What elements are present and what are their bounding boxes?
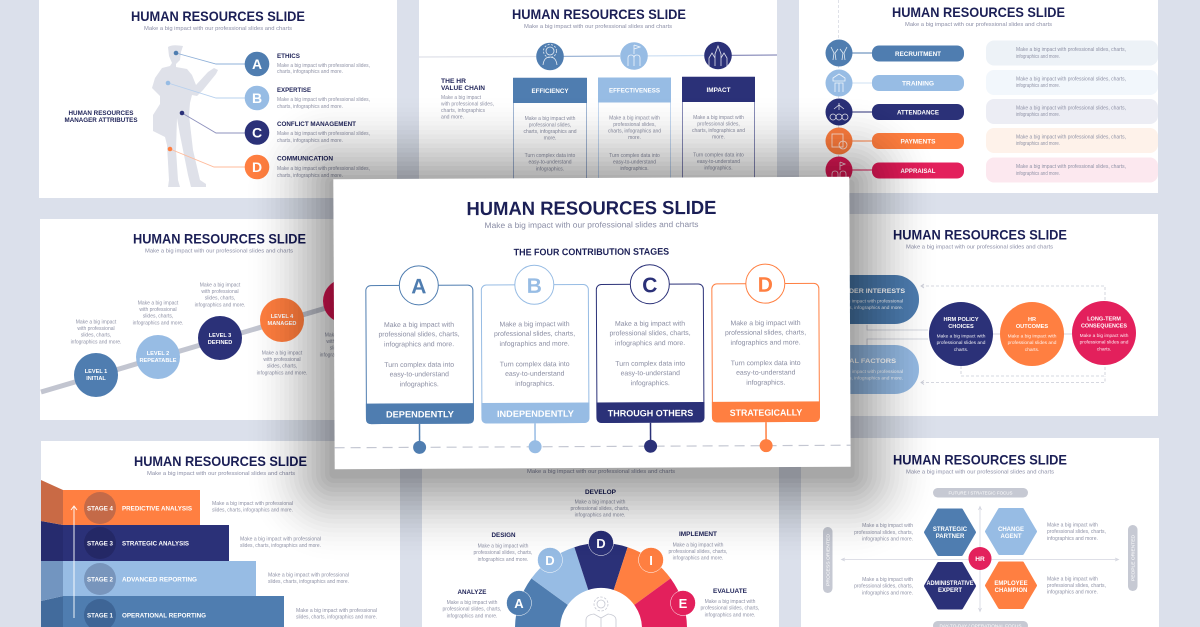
card D: strategically: STRATEGICALLY (730, 407, 802, 418)
stage 3 strategic analysis: slides, charts, infographics and more. (240, 543, 321, 549)
level 2 repeatable: with professional (139, 307, 177, 313)
row: appraisal (826, 156, 1158, 184)
text: strategic partner note: professional slides, charts, (854, 530, 913, 536)
circle: HRM policy choices (929, 302, 993, 366)
row: payments (826, 128, 1158, 154)
circle: HRM policy choices: Make a big impact with (937, 334, 986, 340)
text: change agent note: Make a big impact with (1047, 522, 1098, 528)
row: training (826, 70, 1158, 96)
stage 3 strategic analysis (41, 521, 321, 561)
step: develop: infographics and more. (575, 512, 625, 518)
text: the HR value chain: Make a big impact (441, 95, 482, 101)
hexagon: strategic partner: STRATEGIC (933, 527, 968, 533)
step: evaluate: Make a big impact with (705, 599, 756, 605)
circle: HR outcomes: HR (1028, 317, 1036, 323)
row: recruitment: RECRUITMENT (895, 52, 941, 58)
card: effectiveness: more. (628, 135, 641, 141)
card B: independently: B (527, 275, 542, 298)
diagonal growth line (41, 298, 360, 392)
card D: strategically: easy-to-understand (736, 370, 796, 377)
subtitle: main slide: Make a big impact with our professional slides and charts (485, 220, 699, 230)
level 1 initial: infographics and more. (71, 340, 121, 346)
stage 2 advanced reporting: Make a big impact with professional (268, 572, 349, 578)
level 3 defined (195, 282, 245, 360)
circle: HR centre: HR (975, 556, 985, 563)
text: the HR value chain: with professional slides, (441, 102, 494, 108)
panel: HR process list slide (799, 0, 1158, 193)
card: effectiveness: easy-to-understand (613, 160, 656, 166)
stage 4 predictive analysis: Make a big impact with professional (212, 501, 293, 507)
stage 3 strategic analysis: STAGE 3 (87, 540, 114, 548)
pill: situational factors: SITUATIONAL FACTORS (810, 359, 896, 365)
step: design: professional slides, charts, (474, 550, 532, 556)
text: the HR value chain: THE HR (441, 79, 467, 85)
card: impact: more. (712, 134, 725, 140)
icon: impact growth people (704, 42, 732, 69)
card B: independently: INDEPENDENTLY (497, 409, 574, 419)
card D: strategically (711, 264, 820, 452)
title: stages slide: HUMAN RESOURCES SLIDE (134, 453, 307, 469)
level 4 managed: slides, charts, (267, 364, 297, 370)
card D: strategically: Turn complex data into (731, 360, 801, 367)
card C: through others: C (642, 274, 657, 297)
attribute A: Make a big impact with professional slides, (277, 63, 370, 69)
level 3 defined: LEVEL 3 (209, 333, 231, 339)
row: recruitment: Make a big impact with professional slides, charts, (1016, 47, 1126, 53)
panel: HR roles quadrant slide (801, 438, 1159, 627)
circle: HR outcomes: charts. (1025, 347, 1039, 353)
circle: long-term consequences: professional slides and (1080, 340, 1129, 346)
attribute C: CONFLICT MANAGEMENT (277, 122, 356, 128)
card B: independently (481, 265, 590, 454)
hexagon: employee champion: CHAMPION (995, 588, 1027, 594)
axis pill: process oriented: PROCESS ORIENTED (826, 533, 831, 586)
attribute B (166, 81, 370, 110)
level 5 optimizing: with professional (326, 339, 364, 345)
title: main slide: HUMAN RESOURCES SLIDE (466, 198, 716, 220)
text: employee champion note: professional slides, charts, (1047, 583, 1106, 589)
circle: long-term consequences: Make a big impact with (1080, 333, 1129, 339)
step: design (474, 533, 562, 572)
row: training: TRAINING (902, 82, 934, 88)
card: efficiency: Make a big impact with (525, 116, 576, 122)
card C: through others: easy-to-understand (621, 370, 680, 377)
hexagon: change agent: AGENT (1000, 534, 1022, 540)
card B: independently: infographics. (515, 381, 554, 388)
hexagon: change agent: CHANGE (998, 527, 1024, 533)
hexagon: employee champion (986, 563, 1036, 608)
step: develop: professional slides, charts, (571, 506, 629, 512)
text: employee champion note: infographics and more. (1047, 590, 1098, 596)
attribute A: A (252, 56, 262, 72)
level 2 repeatable: LEVEL 2 (147, 351, 169, 357)
level 3 defined: slides, charts, (205, 296, 235, 302)
card: impact: easy-to-understand (697, 159, 740, 165)
level 4 managed: with professional (263, 357, 301, 363)
text: strategic partner note: Make a big impact with (862, 523, 913, 529)
step: evaluate (670, 589, 759, 618)
text: the HR value chain: charts, infographics (441, 108, 486, 114)
level 4 managed: infographics and more. (257, 370, 307, 376)
step: evaluate: E (679, 596, 688, 611)
card D: strategically: professional slides, charts, (725, 329, 806, 337)
stage 1 operational reporting (41, 596, 377, 627)
level 3 defined: with professional (201, 289, 239, 295)
text: employee champion note (1047, 576, 1106, 596)
row: appraisal: APPRAISAL (900, 169, 936, 175)
card: effectiveness: Make a big impact with (609, 116, 660, 122)
card A: dependently: Make a big impact with (384, 322, 454, 329)
level 1 initial: slides, charts, (81, 332, 111, 338)
text: strategic partner note: infographics and more. (862, 536, 913, 542)
subtitle: stages slide: Make a big impact with our professional slides and charts (147, 471, 295, 477)
card: impact (682, 77, 755, 192)
step: evaluate: professional slides, charts, (701, 606, 759, 612)
level 1 initial: Make a big impact (76, 320, 117, 326)
row: payments: Make a big impact with professional slides, charts, (1016, 134, 1126, 140)
level 2 repeatable: REPEATABLE (139, 358, 177, 364)
step: evaluate: EVALUATE (713, 589, 747, 595)
pill: situational factors (800, 345, 919, 394)
attribute C: charts, infographics and more. (277, 138, 343, 144)
arrow: upward progression (71, 506, 77, 618)
attribute A: charts, infographics and more. (277, 69, 343, 75)
circle: HRM policy choices: professional slides and (937, 340, 986, 346)
main slide drop shadow (244, 94, 940, 564)
attribute C: C (252, 124, 262, 140)
text: administrative expert note: professional slides, charts, (854, 584, 913, 590)
chain line (419, 55, 777, 57)
panel: manager attributes slide (39, 0, 397, 198)
card: effectiveness: infographics. (620, 166, 649, 172)
title: value chain slide: HUMAN RESOURCES SLIDE (512, 6, 686, 22)
stage 1 operational reporting: Make a big impact with professional (296, 608, 377, 614)
card: impact: Make a big impact with (693, 115, 744, 121)
attribute B: EXPERTISE (277, 88, 311, 94)
row: attendance: ATTENDANCE (897, 110, 939, 116)
level 2 repeatable: slides, charts, (143, 314, 173, 320)
pill: stakeholder interests (800, 275, 919, 324)
text: employee champion note: Make a big impact with (1047, 576, 1098, 582)
heading: the four contribution stages: THE FOUR CONTRIBUTION STAGES (514, 247, 669, 258)
text: strategic partner note (854, 523, 913, 542)
subtitle: ADDIE slide: Make a big impact with our professional slides and charts (527, 469, 675, 475)
card: efficiency (513, 78, 587, 193)
title: process list slide: HUMAN RESOURCES SLIDE (892, 4, 1065, 20)
step: analyze: Make a big impact with (447, 600, 498, 606)
attribute D: charts, infographics and more. (277, 173, 343, 179)
subtitle: flow slide: Make a big impact with our professional slides and charts (906, 244, 1053, 250)
card: impact: infographics. (704, 166, 733, 172)
circle: HRM policy choices: charts. (954, 347, 968, 353)
attribute D: Make a big impact with professional slides, (277, 166, 370, 172)
title: attributes slide: HUMAN RESOURCES SLIDE (131, 8, 305, 24)
stage 4 predictive analysis: slides, charts, infographics and more. (212, 508, 293, 514)
row: training: Make a big impact with professional slides, charts, (1016, 76, 1126, 82)
panel: four contribution stages slide (333, 177, 851, 469)
card B: independently: Make a big impact with (499, 321, 570, 328)
title: flow slide: HUMAN RESOURCES SLIDE (893, 226, 1067, 242)
step: analyze: infographics and more. (447, 614, 497, 620)
title: quadrant slide: HUMAN RESOURCES SLIDE (893, 452, 1067, 468)
circle: HRM policy choices: HRM POLICY (943, 317, 979, 323)
step: design: infographics and more. (478, 557, 528, 563)
card: impact: Turn complex data into (693, 152, 744, 158)
row: attendance (826, 98, 1158, 126)
level 1 initial: LEVEL 1 (85, 369, 107, 375)
text: the HR value chain: and more. (441, 114, 464, 120)
subtitle: maturity slide: Make a big impact with our professional slides and charts (145, 248, 293, 254)
card: effectiveness: professional slides, (613, 122, 656, 128)
card: efficiency: professional slides, (529, 122, 571, 128)
row: attendance: Make a big impact with professional slides, charts, (1016, 106, 1126, 112)
pill: stakeholder interests: STAKEHOLDER INTERESTS (811, 289, 905, 295)
card A: dependently: professional slides, charts, (378, 331, 460, 339)
circle: HR centre (968, 547, 992, 570)
step: implement: IMPLEMENT (679, 532, 717, 538)
quadrant axes (842, 506, 1118, 612)
card: impact: IMPACT (706, 87, 731, 94)
card A: dependently: infographics and more. (384, 341, 454, 349)
level 2 repeatable: infographics and more. (133, 320, 183, 326)
axis pill: strategic focus: FUTURE / STRATEGIC FOCUS (948, 491, 1012, 496)
level 3 defined: infographics and more. (195, 302, 245, 308)
card B: independently: easy-to-understand (505, 371, 565, 378)
hexagon: strategic partner: PARTNER (936, 534, 965, 540)
hexagon: administrative expert: EXPERT (938, 588, 962, 594)
attribute A (174, 51, 370, 76)
level 4 managed: Make a big impact (262, 350, 303, 356)
step: implement: I (649, 553, 653, 568)
step: implement (638, 532, 727, 572)
circle: HRM policy choices: CHOICES (948, 324, 974, 330)
level 5 optimizing (320, 279, 370, 358)
card B: independently: professional slides, charts, (494, 331, 575, 338)
row: recruitment: infographics and more. (1016, 54, 1060, 60)
panel: analytics stages slide (41, 441, 400, 627)
panel: ADDIE wheel slide (422, 440, 779, 627)
card C: through others: infographics. (631, 380, 670, 387)
row: attendance: infographics and more. (1016, 112, 1060, 118)
subtitle: quadrant slide: Make a big impact with our professional slides and charts (906, 470, 1054, 476)
circle: long-term consequences: charts. (1097, 346, 1111, 352)
card C: through others: infographics and more. (615, 340, 685, 347)
feedback arrows (867, 284, 1105, 384)
stage 4 predictive analysis: STAGE 4 (87, 506, 114, 512)
title: maturity slide: HUMAN RESOURCES SLIDE (133, 230, 306, 246)
card: efficiency: EFFICIENCY (532, 88, 569, 95)
card D: strategically: infographics and more. (731, 339, 801, 347)
axis pill: strategic focus (933, 488, 1028, 498)
card: efficiency: easy-to-understand (528, 160, 572, 166)
axis pill: process oriented (823, 527, 832, 593)
pill: situational factors: slides, charts, infographics and more. (824, 376, 903, 382)
step: design: D (545, 553, 555, 568)
axis pill: people oriented: PEOPLE ORIENTED (1131, 534, 1136, 581)
card: impact: charts, infographics and (692, 128, 745, 134)
attribute A: ETHICS (277, 54, 300, 60)
card: effectiveness (598, 78, 671, 193)
text: change agent note: infographics and more. (1047, 536, 1098, 542)
step: analyze (443, 590, 532, 620)
level 3 defined: DEFINED (208, 340, 232, 346)
axis pill: people oriented (1128, 525, 1138, 591)
stage 2 advanced reporting: slides, charts, infographics and more. (268, 579, 349, 585)
hexagon: strategic partner (926, 510, 974, 554)
card: efficiency: more. (544, 136, 556, 142)
baseline dashed timeline (335, 445, 851, 448)
level 5 optimizing: infographics and more. (320, 352, 370, 358)
step: develop: Make a big impact with (575, 500, 626, 506)
card A: dependently (365, 266, 474, 454)
level 4 managed: MANAGED (268, 321, 296, 327)
row: payments: PAYMENTS (900, 140, 936, 146)
attribute B: B (252, 90, 262, 106)
card: effectiveness: EFFECTIVENESS (609, 88, 660, 94)
row: payments: infographics and more. (1016, 141, 1060, 147)
card B: independently: Turn complex data into (500, 361, 570, 368)
row: recruitment (826, 40, 1158, 66)
circle: long-term consequences: LONG-TERM (1087, 316, 1121, 322)
step: implement: infographics and more. (673, 556, 723, 562)
step: implement: professional slides, charts, (669, 549, 727, 555)
step: analyze: professional slides, charts, (443, 606, 501, 612)
label: manager attributes: MANAGER ATTRIBUTES (64, 118, 138, 124)
attribute B: charts, infographics and more. (277, 104, 343, 110)
stage 2 advanced reporting (41, 561, 349, 601)
card C: through others: THROUGH OTHERS (608, 408, 693, 418)
circle: HR outcomes: Make a big impact with (1008, 334, 1057, 340)
circle: HR outcomes: professional slides and (1008, 340, 1057, 346)
level 1 initial (71, 320, 121, 397)
row: training: infographics and more. (1016, 83, 1060, 89)
hexagon: change agent (986, 510, 1036, 554)
stage 4 predictive analysis (41, 480, 293, 525)
card C: through others (596, 264, 705, 453)
card A: dependently: Turn complex data into (384, 362, 454, 369)
row: appraisal: infographics and more. (1016, 171, 1060, 177)
hexagon: administrative expert: ADMINISTRATIVE (926, 581, 974, 587)
label: manager attributes (64, 111, 138, 124)
card: effectiveness: charts, infographics and (608, 128, 661, 134)
text: administrative expert note: Make a big impact with (862, 577, 913, 583)
level 2 repeatable (133, 300, 183, 379)
panel: maturity levels slide (40, 219, 398, 420)
icon: person with gear (586, 597, 616, 627)
stage 1 operational reporting: slides, charts, infographics and more. (296, 614, 377, 620)
card A: dependently: infographics. (400, 381, 439, 388)
card: impact: professional slides, (697, 122, 740, 128)
hexagon: administrative expert (926, 564, 974, 608)
step: develop (571, 490, 629, 556)
card D: strategically: Make a big impact with (730, 320, 801, 327)
text: administrative expert note: infographics and more. (862, 590, 913, 596)
stage 2 advanced reporting: ADVANCED REPORTING (122, 576, 197, 584)
attribute D (168, 147, 370, 179)
step: develop: DEVELOP (585, 490, 616, 496)
stage 3 strategic analysis: STRATEGIC ANALYSIS (122, 540, 189, 548)
level 1 initial: INITIAL (86, 376, 106, 382)
card D: strategically: D (758, 274, 773, 297)
text: administrative expert note (854, 577, 913, 596)
text: change agent note: professional slides, charts, (1047, 529, 1106, 535)
semicircle wheel segments (515, 543, 687, 627)
level 4 managed (257, 298, 307, 376)
stage 3 strategic analysis: Make a big impact with professional (240, 536, 321, 542)
step: design: Make a big impact with (478, 544, 529, 550)
card A: dependently: A (411, 275, 426, 298)
step: analyze: A (514, 596, 524, 611)
level 4 managed: LEVEL 4 (271, 314, 294, 320)
level 3 defined: Make a big impact (200, 282, 241, 288)
hexagon: employee champion: EMPLOYEE (994, 581, 1028, 587)
card C: through others: professional slides, charts, (609, 330, 691, 337)
icon: efficiency gear person (536, 43, 564, 70)
panel: HR value chain slide (419, 0, 777, 198)
card: efficiency: Turn complex data into (525, 153, 576, 159)
subtitle: attributes slide: Make a big impact with our professional slides and charts (144, 26, 292, 32)
circle: HR outcomes: OUTCOMES (1016, 324, 1048, 330)
stage 1 operational reporting: OPERATIONAL REPORTING (122, 612, 206, 620)
text: change agent note (1047, 522, 1106, 542)
figure: standing manager silhouette (152, 45, 218, 187)
step: implement: Make a big impact with (673, 542, 724, 548)
row: appraisal: Make a big impact with professional slides, charts, (1016, 164, 1126, 170)
attribute C (180, 111, 370, 145)
step: analyze: ANALYZE (458, 590, 486, 596)
level 5 optimizing: Make a big impact (325, 332, 366, 338)
attribute B: Make a big impact with professional slides, (277, 97, 370, 103)
attribute D: D (252, 159, 262, 175)
pill: stakeholder interests: Make a big impact with professional (827, 298, 903, 304)
panel: HR systems flow slide (800, 214, 1158, 416)
text: the HR value chain (441, 79, 494, 120)
level 5 optimizing: slides, charts, (330, 346, 360, 352)
step: develop: D (596, 536, 606, 551)
card: effectiveness: Turn complex data into (609, 153, 660, 159)
text: the HR value chain: VALUE CHAIN (441, 86, 485, 92)
pill: stakeholder interests: slides, charts, infographics and more. (824, 305, 903, 311)
subtitle: value chain slide: Make a big impact with our professional slides and charts (524, 24, 672, 30)
icon: effectiveness flag team (620, 42, 648, 70)
card D: strategically: infographics. (746, 380, 785, 387)
level 1 initial: with professional (77, 326, 115, 332)
attribute D: COMMUNICATION (277, 156, 333, 162)
circle: long-term consequences (1072, 301, 1136, 365)
stage 1 operational reporting: STAGE 1 (87, 612, 114, 620)
axis pill: operational focus (933, 621, 1028, 627)
circle: HR outcomes (1000, 302, 1064, 366)
card: efficiency: infographics. (536, 166, 564, 172)
circle: long-term consequences: CONSEQUENCES (1081, 324, 1127, 330)
step: design: DESIGN (492, 533, 516, 539)
subtitle: process list slide: Make a big impact with our professional slides and charts (905, 22, 1052, 28)
card C: through others: Turn complex data into (615, 361, 685, 368)
card A: dependently: easy-to-understand (390, 371, 449, 378)
stage 2 advanced reporting: STAGE 2 (87, 576, 114, 584)
stage 4 predictive analysis: PREDICTIVE ANALYSIS (122, 506, 192, 512)
attribute C: Make a big impact with professional slides, (277, 131, 370, 137)
card A: dependently: DEPENDENTLY (386, 409, 454, 420)
card B: independently: infographics and more. (500, 341, 570, 348)
card: efficiency: charts, infographics and (523, 129, 577, 135)
level 2 repeatable: Make a big impact (138, 300, 179, 306)
label: manager attributes: HUMAN RESOURCES (68, 111, 134, 117)
pill: situational factors: Make a big impact with professional (827, 369, 903, 375)
step: evaluate: infographics and more. (705, 612, 755, 618)
card C: through others: Make a big impact with (615, 321, 685, 328)
